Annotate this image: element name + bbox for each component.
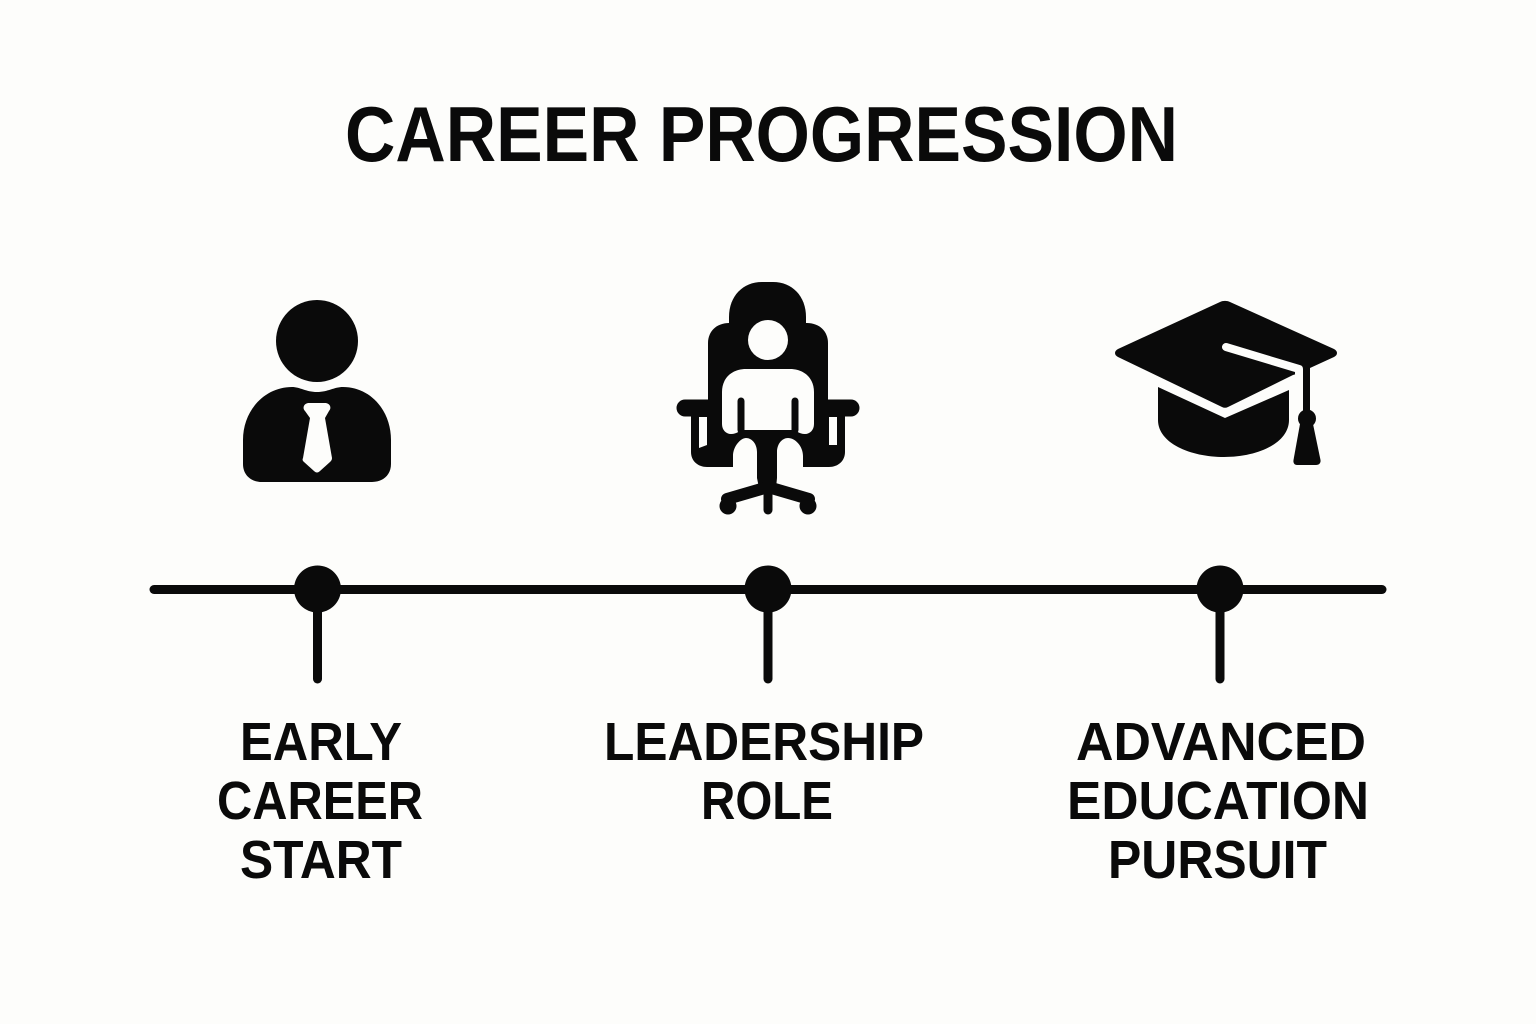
label: early career start: CAREER [217,771,423,831]
icon: person with tie [243,300,391,482]
label: leadership role: ROLE [701,771,833,831]
label: early career start [217,712,423,890]
label: advanced education pursuit: PURSUIT [1108,830,1327,890]
icon: graduation cap [1115,301,1337,465]
label: early career start: EARLY [240,712,402,772]
timeline marker: education [1196,566,1244,679]
label: advanced education pursuit: ADVANCED [1076,712,1366,772]
icon: leadership chair [685,282,851,514]
timeline line [154,585,1382,594]
label: advanced education pursuit: EDUCATION [1067,771,1369,831]
label: early career start: START [240,830,402,890]
label: leadership role [604,712,924,831]
title: CAREER PROGRESSION [345,90,1178,178]
timeline marker: leadership [744,566,792,679]
label: advanced education pursuit [1067,712,1369,890]
timeline marker: early career [294,566,341,679]
label: leadership role: LEADERSHIP [604,712,924,772]
